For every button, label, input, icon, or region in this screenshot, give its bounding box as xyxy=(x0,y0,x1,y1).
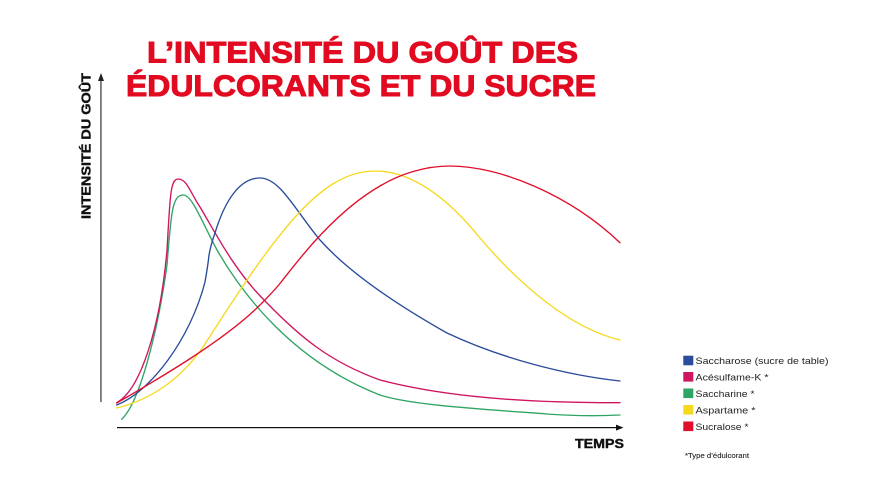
curve: saccharine xyxy=(122,195,620,419)
x axis arrow xyxy=(117,425,624,431)
legend item: saccharose: Saccharose (sucre de table) xyxy=(696,356,828,367)
x axis label: TEMPS xyxy=(575,436,624,451)
legend item: saccharine: Saccharine * xyxy=(696,389,755,400)
curve: aspartame xyxy=(117,171,620,408)
y axis label: INTENSITÉ DU GOÛT xyxy=(78,73,94,219)
legend item: acésulfame-K: Acésulfame-K * xyxy=(696,372,769,383)
line chart xyxy=(117,166,620,419)
curve: acésulfame-K xyxy=(117,179,620,403)
curve: sucralose xyxy=(117,166,620,403)
title: ÉDULCORANTS ET DU SUCRE xyxy=(126,69,596,103)
footnote: *Type d’édulcorant xyxy=(685,453,749,460)
legend item: aspartame: Aspartame * xyxy=(696,405,756,416)
legend xyxy=(683,356,828,433)
title: L’INTENSITÉ DU GOÛT DES xyxy=(147,36,578,70)
y axis arrow xyxy=(98,73,104,402)
curve: saccharose xyxy=(117,178,620,405)
title xyxy=(126,36,596,103)
legend item: sucralose: Sucralose * xyxy=(696,422,749,433)
